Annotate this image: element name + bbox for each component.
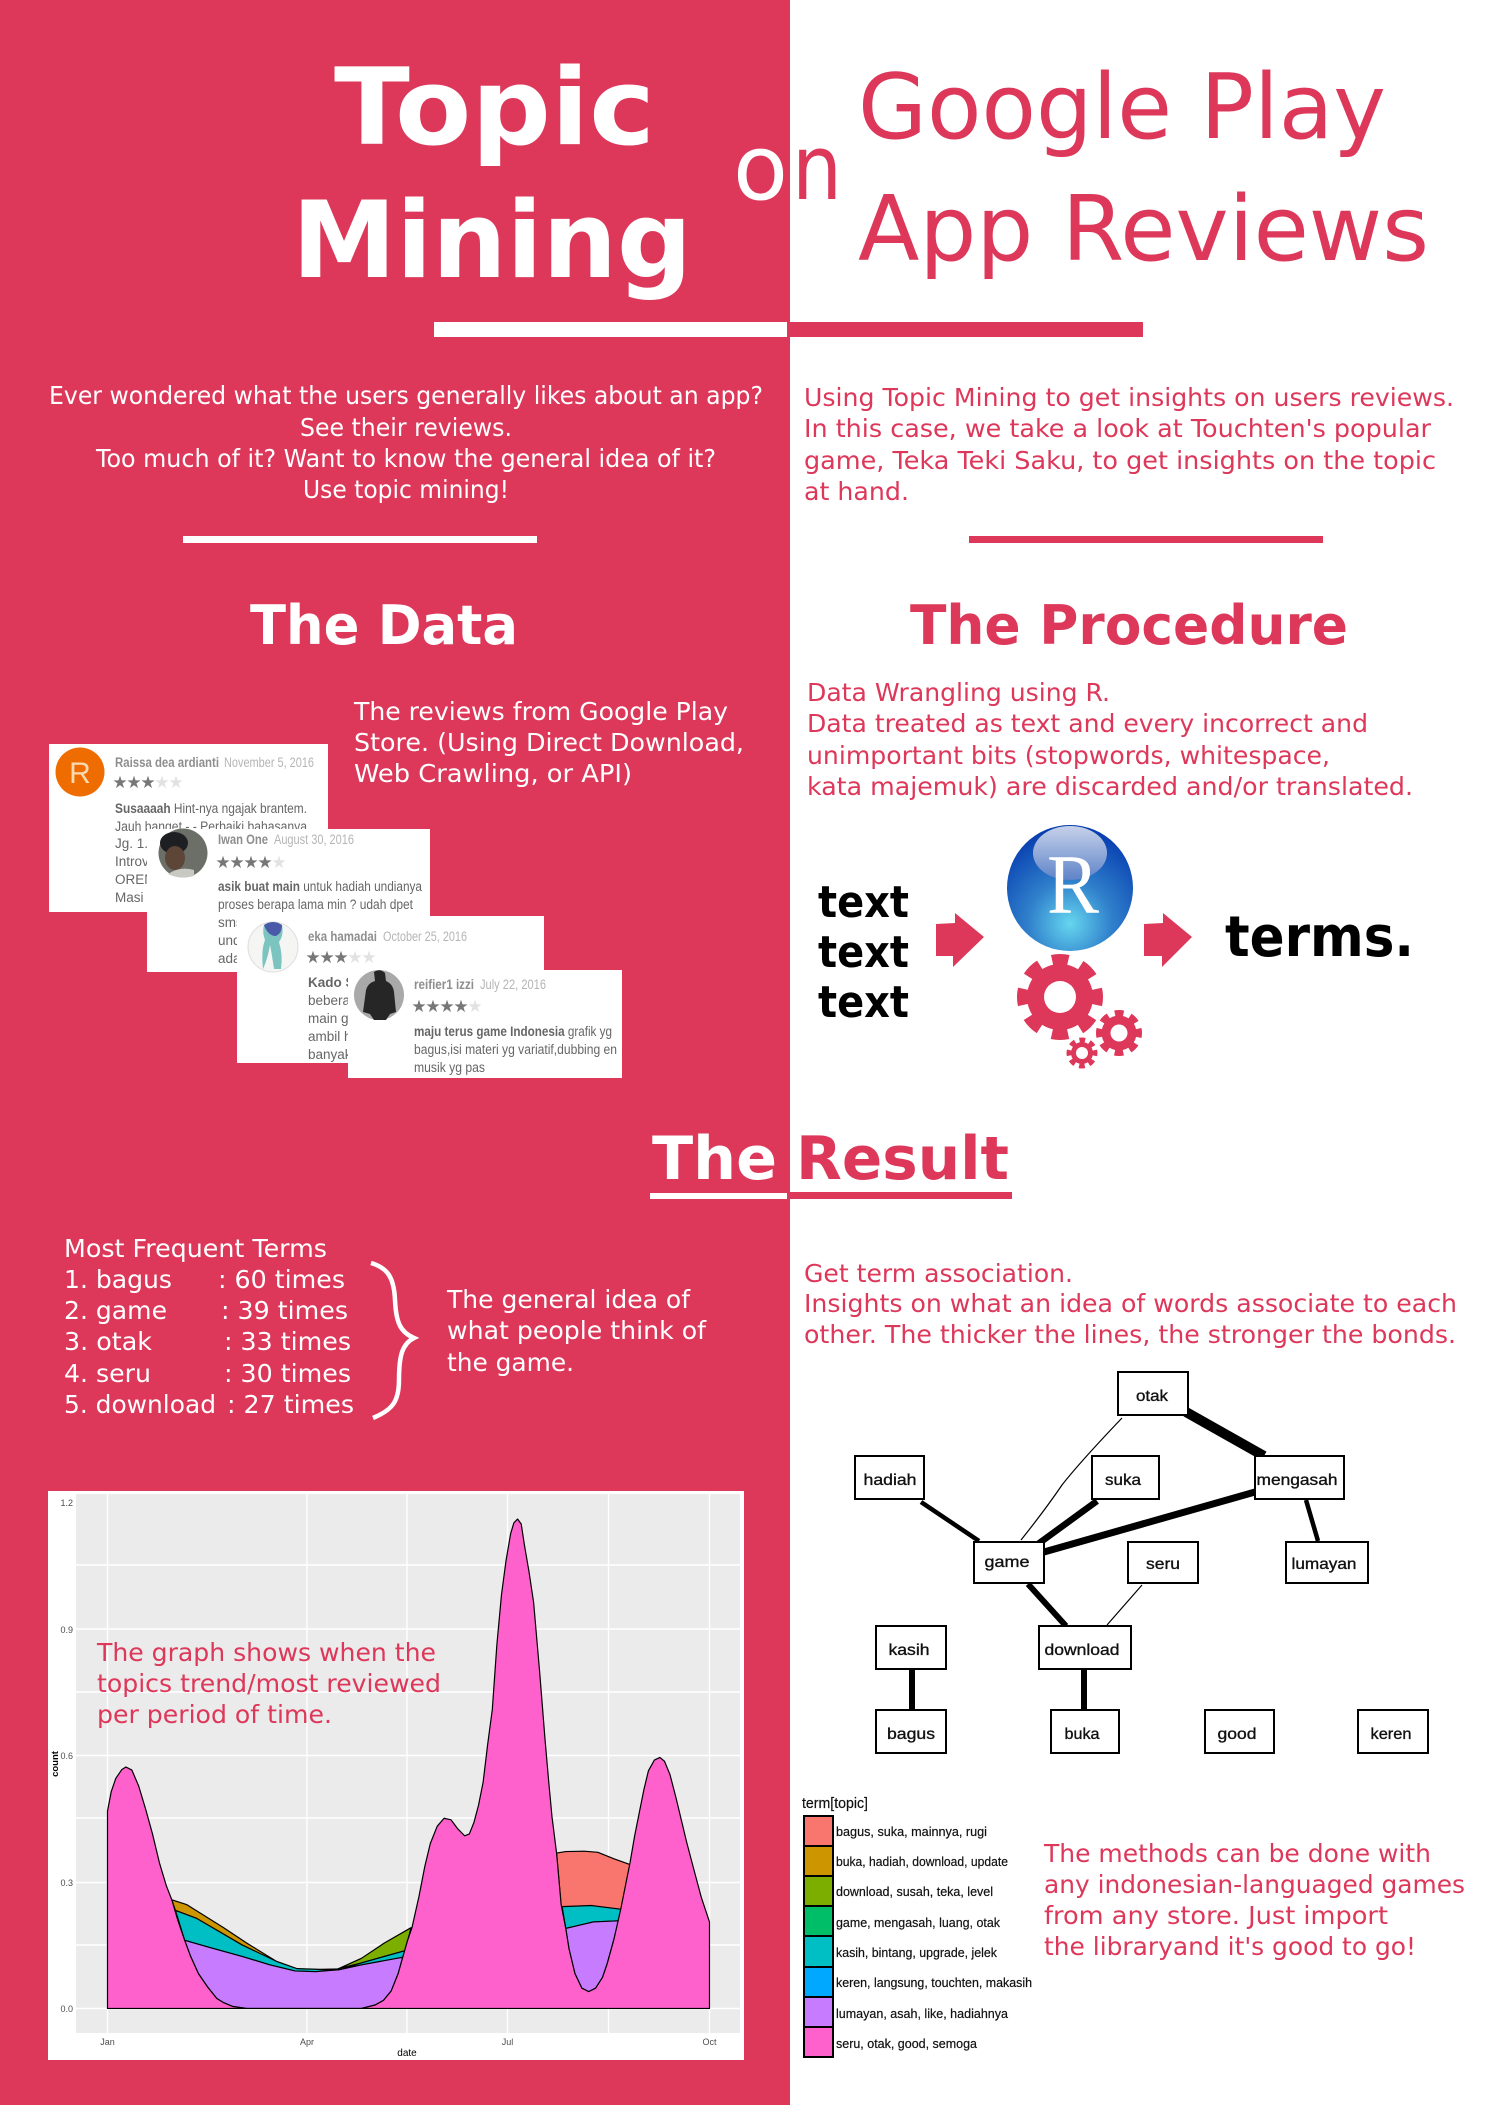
node: game: game [984,1554,1030,1571]
title: Google Play App Reviews [858,55,1429,282]
text block: general idea: The general idea of [446,1285,691,1314]
text block: most frequent terms: : 60 times [218,1265,345,1294]
node: buka [1051,1710,1119,1753]
text block: most frequent terms: 1. bagus [64,1265,172,1294]
axis titles: count [50,1750,61,1777]
node: hadiah [855,1456,924,1499]
node: kasih: kasih [888,1642,930,1659]
text block: intro right: game, Teka Teki Saku, to get insights on the topic [804,446,1436,475]
text block: term association: other. The thicker the lines, the stronger the bonds. [804,1320,1456,1349]
node: keren: keren [1370,1726,1412,1743]
node: mengasah: mengasah [1256,1472,1338,1489]
y axis tick labels: 0.6 [60,1751,73,1761]
text block: methods [1043,1839,1465,1961]
legend: term[topic]: seru, otak, good, semoga [836,2036,978,2051]
node: otak [1118,1372,1188,1415]
divider right [969,536,1323,543]
text block: intro right: In this case, we take a look at Touchten's popular [804,414,1432,443]
heading: The Result: The [652,1124,777,1194]
legend: term[topic]: term[topic] [802,1795,868,1812]
review card 1: Masi b [115,890,155,905]
procedure input: text text text: text [818,977,909,1028]
x axis tick labels: Jul [502,2037,513,2047]
procedure output: terms.: terms. [1225,905,1414,970]
review card 2: ★★★★ [215,853,273,873]
text block: most frequent terms: 3. otak [64,1327,153,1356]
text block: most frequent terms: 4. seru [64,1359,151,1388]
text block: term association: Get term association. [804,1259,1073,1288]
node: download: download [1044,1642,1120,1659]
legend: term[topic]: buka, hadiah, download, update [836,1854,1008,1869]
review card 3: ambil h [308,1029,352,1044]
text block: general idea: the game. [447,1348,574,1377]
review card 2: proses berapa lama min ? udah dpet [218,897,413,912]
review card 1: Jauh banget - - Perbaiki bahasanya [115,819,307,834]
text block: intro left [49,381,763,504]
axis titles [50,1750,417,2059]
review cards screenshot collage [49,744,622,1078]
text block: most frequent terms: : 39 times [221,1296,348,1325]
text block: intro right: Using Topic Mining to get insights on users reviews. [804,383,1454,412]
node: good [1205,1710,1274,1753]
title: on [733,116,842,221]
review card 2 [147,828,430,972]
y axis tick labels: 0.9 [60,1625,73,1635]
review card 3 [237,916,544,1063]
chart annotation text: topics trend/most reviewed [97,1669,441,1698]
y axis tick labels [60,1498,73,2014]
text block: term association [804,1259,1457,1349]
text block: most frequent terms: 2. game [64,1296,167,1325]
node: suka [1092,1456,1159,1499]
text block: general idea [446,1285,707,1377]
node: hadiah: hadiah [864,1472,916,1489]
node: kasih [876,1626,946,1669]
review card 1: ★★ [154,773,184,793]
heading: The Result [650,1124,1012,1199]
node: good: good [1218,1726,1256,1743]
divider left [183,536,537,543]
text block: procedure description: kata majemuk) are discarded and/or translated. [807,772,1413,801]
node: game [974,1542,1044,1583]
graph edges [912,1412,1318,1711]
y axis tick labels: 0.0 [60,2004,73,2014]
text block: most frequent terms [64,1234,354,1419]
text block: general idea: what people think of [447,1316,707,1345]
text block: data description [353,697,744,788]
text block: data description: Web Crawling, or API) [354,759,632,788]
review card 4 [348,970,622,1078]
text block: procedure description: unimportant bits (stopwords, whitespace, [807,741,1330,770]
text block: data description: Store. (Using Direct Download, [354,728,744,757]
stacked density areas [107,1519,709,2008]
text block: intro left: Too much of it? Want to know the general idea of it? [95,444,716,473]
title: Topic Mining: Mining [292,179,692,302]
review card 3: Kado S [308,975,355,990]
review card 1: Jg. 1. A [115,836,160,851]
heading: The Result: Result [796,1124,1009,1194]
text block: most frequent terms: Most Frequent Terms [64,1234,327,1263]
text block: methods: from any store. Just import [1044,1901,1388,1930]
chart annotation text [96,1638,441,1729]
node: keren [1358,1710,1428,1753]
panel: left red background [0,0,790,2105]
arrow: text to R [936,913,984,967]
node: download [1039,1626,1131,1669]
title divider bar [434,322,1143,337]
y axis tick labels: 1.2 [60,1498,73,1508]
node: lumayan: lumayan [1292,1556,1356,1573]
review card 3: ★★★ [305,948,349,968]
review card 1: Raissa dea ardianti [115,755,219,770]
x axis tick labels [100,2037,717,2047]
review card 2: asik buat main untuk hadiah undianya [218,879,422,894]
review card 3: banyak [308,1047,352,1062]
review card 3: ★★ [347,948,377,968]
text block: intro left: See their reviews. [300,413,512,442]
text block: intro right [804,383,1454,506]
review card 2: Iwan One [218,832,268,847]
review card 4: ★★★★ [411,997,469,1017]
legend: term[topic]: kasih, bintang, upgrade, jelek [836,1945,997,1960]
review card 2: August 30, 2016 [274,832,354,847]
chart annotation text: The graph shows when the [96,1638,436,1667]
text block: procedure description: Data treated as text and every incorrect and [807,709,1368,738]
chart annotation text: per period of time. [97,1700,332,1729]
heading: The Data: The Data [250,594,518,657]
x axis tick labels: Oct [702,2037,717,2047]
review card 4: maju terus game Indonesia grafik yg [414,1024,612,1039]
text block: intro left: Use topic mining! [303,475,509,504]
text block: procedure description: Data Wrangling using R. [807,678,1110,707]
title: Topic Mining [292,46,692,302]
review card 4: reifier1 izzi [414,977,474,992]
icon: R logo sphere: R [1047,838,1099,932]
title: on: o [733,116,788,221]
text block: methods: the libraryand it's good to go! [1044,1932,1416,1961]
review card 1: OREN [115,872,154,887]
procedure input: text text text [818,877,909,1028]
review card 3: beberap [308,993,358,1008]
node: suka: suka [1105,1472,1141,1489]
icon: curly brace [371,1263,414,1418]
review card 1: November 5, 2016 [224,755,314,770]
review card 4: July 22, 2016 [480,977,546,992]
text block: most frequent terms: : 33 times [224,1327,351,1356]
text block: data description: The reviews from Google Play [353,697,728,726]
procedure input: text text text: text [818,877,909,928]
node: lumayan [1286,1542,1368,1583]
title: Google Play App Reviews: Google Play [858,55,1386,160]
legend: term[topic]: game, mengasah, luang, otak [836,1915,1000,1930]
review card 1: R [69,757,91,790]
review card 4: bagus,isi materi yg variatif,dubbing en [414,1042,617,1057]
review card 4: musik yg pas [414,1060,485,1075]
review card 4: ★ [467,997,483,1017]
legend: term[topic]: keren, langsung, touchten, makasih [836,1975,1032,1990]
review card 2: ada [218,951,241,966]
text block: term association: Insights on what an idea of words associate to each [804,1289,1457,1318]
axis titles: date [397,2048,417,2059]
review card 1: Introve [115,854,156,869]
icon: gears [1016,953,1142,1069]
text block: methods: The methods can be done with [1043,1839,1431,1868]
text block: most frequent terms: : 30 times [224,1359,351,1388]
review card 3: main ge [308,1011,356,1026]
arrow: R to terms [1144,913,1192,967]
title: Google Play App Reviews: App Reviews [858,177,1429,282]
node: seru [1128,1542,1198,1583]
title: Topic Mining: Topic [334,46,655,169]
chart: topic trend density over time [48,1491,744,2060]
x axis tick labels: Apr [300,2037,314,2047]
review card 2: ★ [271,853,287,873]
text block: intro left: Ever wondered what the users generally likes about an app? [49,381,763,410]
review card 3: eka hamadai [308,929,377,944]
node: bagus [876,1710,946,1753]
node: mengasah [1255,1456,1344,1499]
legend: term[topic]: download, susah, teka, level [836,1884,993,1899]
legend: term[topic]: lumayan, asah, like, hadiahnya [836,2006,1009,2021]
legend: term[topic]: bagus, suka, mainnya, rugi [836,1824,987,1839]
text block: most frequent terms: 5. download [64,1390,216,1419]
title: on: n [792,116,842,221]
heading: The Procedure: The Procedure [910,594,1348,657]
node: seru: seru [1146,1556,1180,1573]
review card 2: und [218,933,241,948]
x axis tick labels: Jan [100,2037,115,2047]
text block: methods: any indonesian-languaged games [1044,1870,1465,1899]
node: buka: buka [1064,1726,1100,1743]
text block: procedure description [807,678,1413,801]
review card 2: sms [218,915,243,930]
icon: R logo sphere [1007,825,1133,951]
review card 1: Susaaaah Hint-nya ngajak brantem. [115,801,307,816]
y axis tick labels: 0.3 [60,1878,73,1888]
review card 3: October 25, 2016 [383,929,467,944]
text block: most frequent terms: : 27 times [227,1390,354,1419]
review card 1: ★★★ [112,773,156,793]
legend: term[topic] [802,1795,1032,2057]
node: otak: otak [1136,1388,1169,1405]
procedure input: text text text: text [818,927,909,978]
network graph: term association [855,1372,1428,1753]
text block: intro right: at hand. [804,477,909,506]
node: bagus: bagus [887,1726,935,1743]
review card 1 [49,744,328,912]
